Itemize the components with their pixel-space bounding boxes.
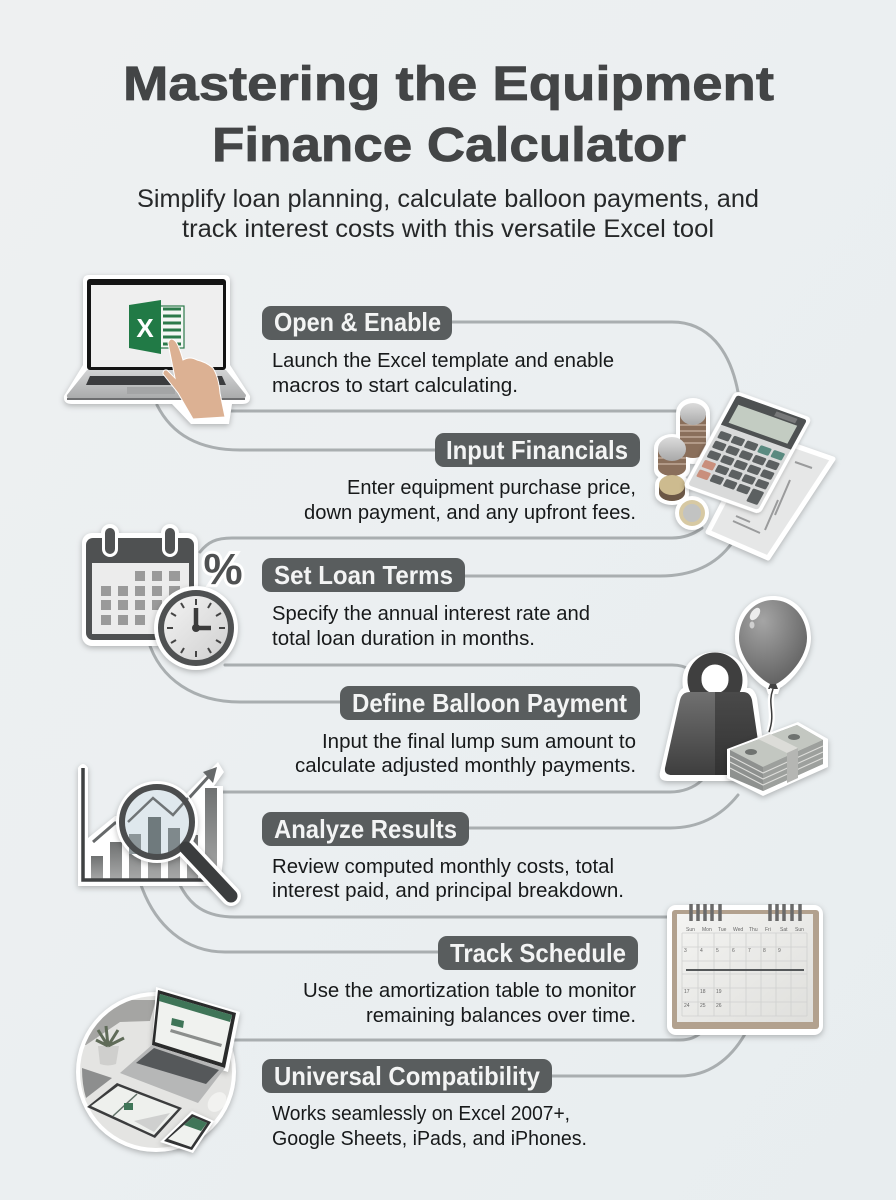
connector: step 1 to calculator (450, 322, 738, 392)
body text: Works seamlessly on Excel 2007+, (272, 1103, 570, 1125)
step 7: Universal Compatibility (262, 1059, 587, 1150)
connector: clock to weight (225, 665, 690, 670)
weekday headers and dates: Sat (780, 927, 788, 933)
body text: Enter equipment purchase price, (347, 477, 636, 499)
weekday headers and dates: 8 (763, 948, 766, 954)
weekday headers and dates: 4 (700, 948, 703, 954)
connector: chart to calendar (180, 885, 670, 917)
body text: interest paid, and principal breakdown. (272, 880, 624, 902)
binder rings (691, 904, 800, 921)
icon: magnifier (116, 781, 231, 896)
title (123, 58, 774, 172)
weekday headers and dates (684, 927, 804, 1009)
pill heading: Universal Compatibility (274, 1061, 540, 1091)
step 2: Input Financials (304, 433, 640, 524)
step 3: Set Loan Terms (262, 558, 590, 650)
trend arrow (93, 767, 217, 842)
phone (160, 1111, 214, 1153)
step 1: Open & Enable (262, 306, 614, 397)
pill heading: Analyze Results (274, 814, 457, 844)
icon: laptop with Excel and hand (64, 275, 250, 424)
mouse (204, 1088, 230, 1116)
pill heading: Track Schedule (450, 938, 626, 968)
icon: calculator (683, 391, 812, 514)
icon: hand pointing (163, 339, 225, 419)
weekday headers and dates: Sun (686, 927, 695, 933)
subtitle: track interest costs with this versatile Excel tool (182, 215, 714, 243)
icon: bar chart with magnifier (78, 762, 231, 896)
body text: Google Sheets, iPads, and iPhones. (272, 1128, 587, 1150)
weekday headers and dates: 3 (684, 948, 687, 954)
weekday headers and dates: 26 (716, 1003, 722, 1009)
connector: step 7 to calendar (550, 1034, 745, 1076)
body text: Specify the annual interest rate and (272, 603, 590, 625)
calendar grid (682, 933, 807, 1016)
infographic canvas (62, 64, 838, 1158)
weekday headers and dates: Tue (718, 927, 727, 933)
weekday headers and dates: 5 (716, 948, 719, 954)
body text (272, 603, 590, 650)
body text (295, 731, 636, 777)
icon: calendar, clock and percent (82, 524, 243, 670)
body text (304, 477, 636, 524)
weekday headers and dates: 7 (748, 948, 751, 954)
body text: Review computed monthly costs, total (272, 856, 614, 878)
connector: chart to money (222, 780, 702, 792)
tablet (87, 1083, 182, 1138)
icon: clock (154, 586, 238, 670)
icon: wall calendar schedule (667, 904, 823, 1035)
weekday headers and dates: Sun (795, 927, 804, 933)
step 4: Define Balloon Payment (295, 686, 640, 777)
icon: weight, balloon and money (660, 596, 828, 796)
body text (272, 856, 624, 902)
chart axes (83, 768, 206, 880)
weekday headers and dates: 25 (700, 1003, 706, 1009)
weekday headers and dates: Mon (702, 927, 712, 933)
connector: laptop to step 2 (157, 405, 437, 450)
body text (303, 980, 636, 1027)
icon: laptop, tablet and phone on desk (76, 987, 240, 1153)
pill heading: Define Balloon Payment (352, 688, 627, 718)
body text: macros to start calculating. (272, 375, 518, 397)
body text (272, 350, 614, 397)
icon: balloon (735, 596, 811, 732)
weekday headers and dates: 18 (700, 989, 706, 995)
connector: devices to calendar (232, 1032, 702, 1040)
laptop (120, 987, 240, 1103)
connector: calendar to calculator (200, 528, 702, 552)
weekday headers and dates: 19 (716, 989, 722, 995)
timeline (686, 969, 804, 971)
body text: Input the final lump sum amount to (322, 731, 636, 753)
weekday headers and dates: 24 (684, 1003, 690, 1009)
subtitle: Simplify loan planning, calculate balloon payments, and (137, 185, 759, 213)
connector: step 5 to money (467, 795, 738, 828)
weekday headers and dates: Fri (765, 927, 771, 933)
chart bars (91, 788, 217, 880)
connector: calendar to step 4 (148, 640, 342, 702)
step 6: Track Schedule (303, 936, 638, 1027)
title: Mastering the Equipment (123, 58, 774, 111)
pill heading: Open & Enable (274, 307, 441, 337)
potted plant (96, 1026, 124, 1066)
connector: laptop to calculator (225, 410, 690, 412)
icon: coin stacks (654, 398, 710, 530)
body text: down payment, and any upfront fees. (304, 502, 636, 524)
weekday headers and dates: 17 (684, 989, 690, 995)
icon: weight (660, 652, 767, 781)
body text: Launch the Excel template and enable (272, 350, 614, 372)
step 5: Analyze Results (262, 812, 624, 902)
icon: Excel logo: X (136, 313, 154, 343)
body text: remaining balances over time. (366, 1005, 636, 1027)
window backdrop (80, 1000, 156, 1045)
icon: money stack (727, 722, 828, 796)
weekday headers and dates: 6 (732, 948, 735, 954)
title: Finance Calculator (212, 119, 686, 172)
pill heading: Set Loan Terms (274, 560, 453, 590)
weekday headers and dates: 9 (778, 948, 781, 954)
subtitle (137, 185, 759, 243)
icon: calculator, receipt and coins (654, 391, 833, 558)
body text (272, 1103, 587, 1150)
body text: Use the amortization table to monitor (303, 980, 636, 1002)
notebook (82, 1068, 112, 1098)
connector: step 3 to calculator (463, 543, 732, 576)
body text: calculate adjusted monthly payments. (295, 755, 636, 777)
icon: percent sign: % (203, 545, 243, 594)
connector: chart to step 6 (141, 885, 440, 952)
icon: calendar (82, 524, 198, 646)
weekday headers and dates: Wed (733, 927, 743, 933)
icon: Excel logo (129, 300, 184, 354)
weekday headers and dates: Thu (749, 927, 758, 933)
body text: total loan duration in months. (272, 628, 535, 650)
icon: receipt (708, 444, 833, 558)
pill heading: Input Financials (446, 435, 628, 465)
